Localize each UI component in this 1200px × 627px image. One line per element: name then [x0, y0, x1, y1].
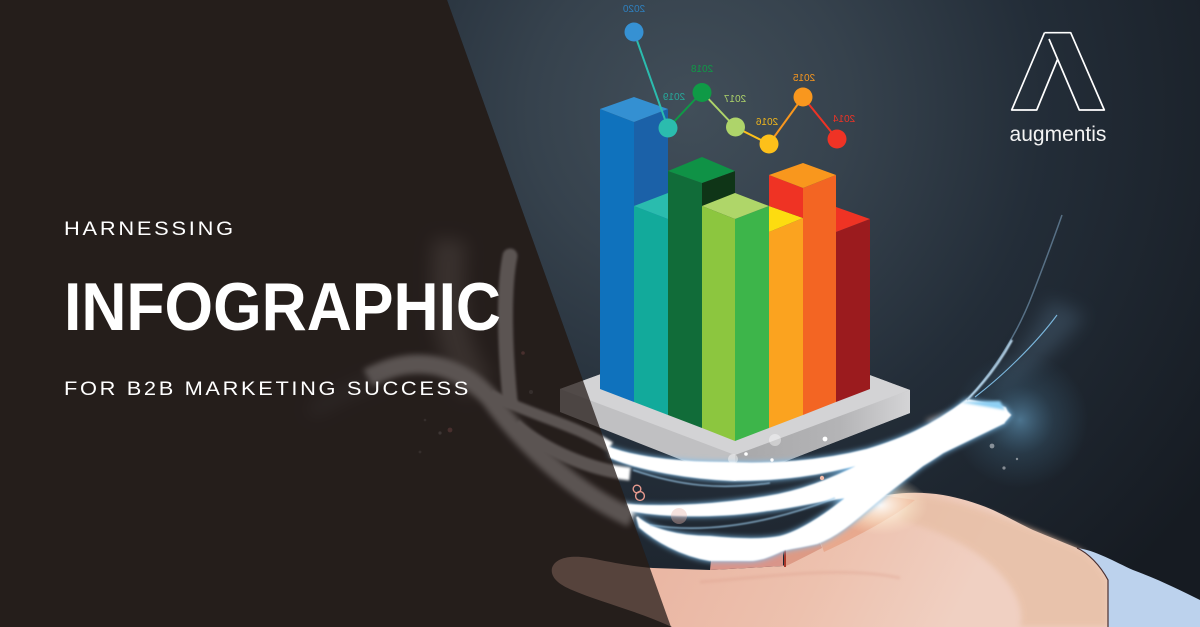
dark diagonal overlay panel — [0, 0, 671, 627]
flare glow — [952, 352, 1088, 488]
logo — [1010, 33, 1106, 146]
mirrored line chart: 2015 — [792, 73, 815, 84]
logo: augmentis — [1010, 123, 1106, 146]
light swoosh — [607, 215, 1088, 560]
heading text — [64, 218, 501, 400]
bar: blue — [600, 97, 668, 402]
arcs — [967, 215, 1062, 400]
swoosh white bands — [607, 400, 1010, 560]
heading line: infographic: INFOGRAPHIC — [64, 269, 501, 345]
isometric bar chart — [600, 97, 870, 441]
sparkle particles — [419, 351, 1018, 524]
bar: tall orange — [769, 163, 836, 415]
bar: teal — [634, 193, 702, 415]
blue streaks — [633, 470, 835, 528]
bar: yellow orange — [769, 206, 803, 428]
left base tone — [0, 0, 671, 627]
swoosh edge glow — [607, 400, 1010, 560]
bar: dark green — [668, 157, 735, 428]
base platform — [560, 325, 910, 481]
mirrored line chart: 2019 — [662, 92, 685, 103]
bar: dark red — [836, 207, 870, 402]
heading line: subtitle: FOR B2B MARKETING SUCCESS — [64, 378, 468, 400]
shirt cuff — [1077, 548, 1200, 627]
bar: lime and green — [702, 193, 769, 441]
mirrored line chart: 2016 — [755, 117, 778, 128]
hand — [552, 475, 1108, 627]
mirrored line chart: 2018 — [690, 64, 713, 75]
ghost swoosh on left — [310, 240, 632, 518]
mirrored line chart — [622, 4, 855, 154]
mirrored line chart: 2020 — [622, 4, 645, 15]
mirrored line chart: 2014 — [832, 114, 855, 125]
mirrored line chart: 2017 — [723, 94, 746, 105]
heading line: harnessing: HARNESSING — [64, 218, 233, 240]
